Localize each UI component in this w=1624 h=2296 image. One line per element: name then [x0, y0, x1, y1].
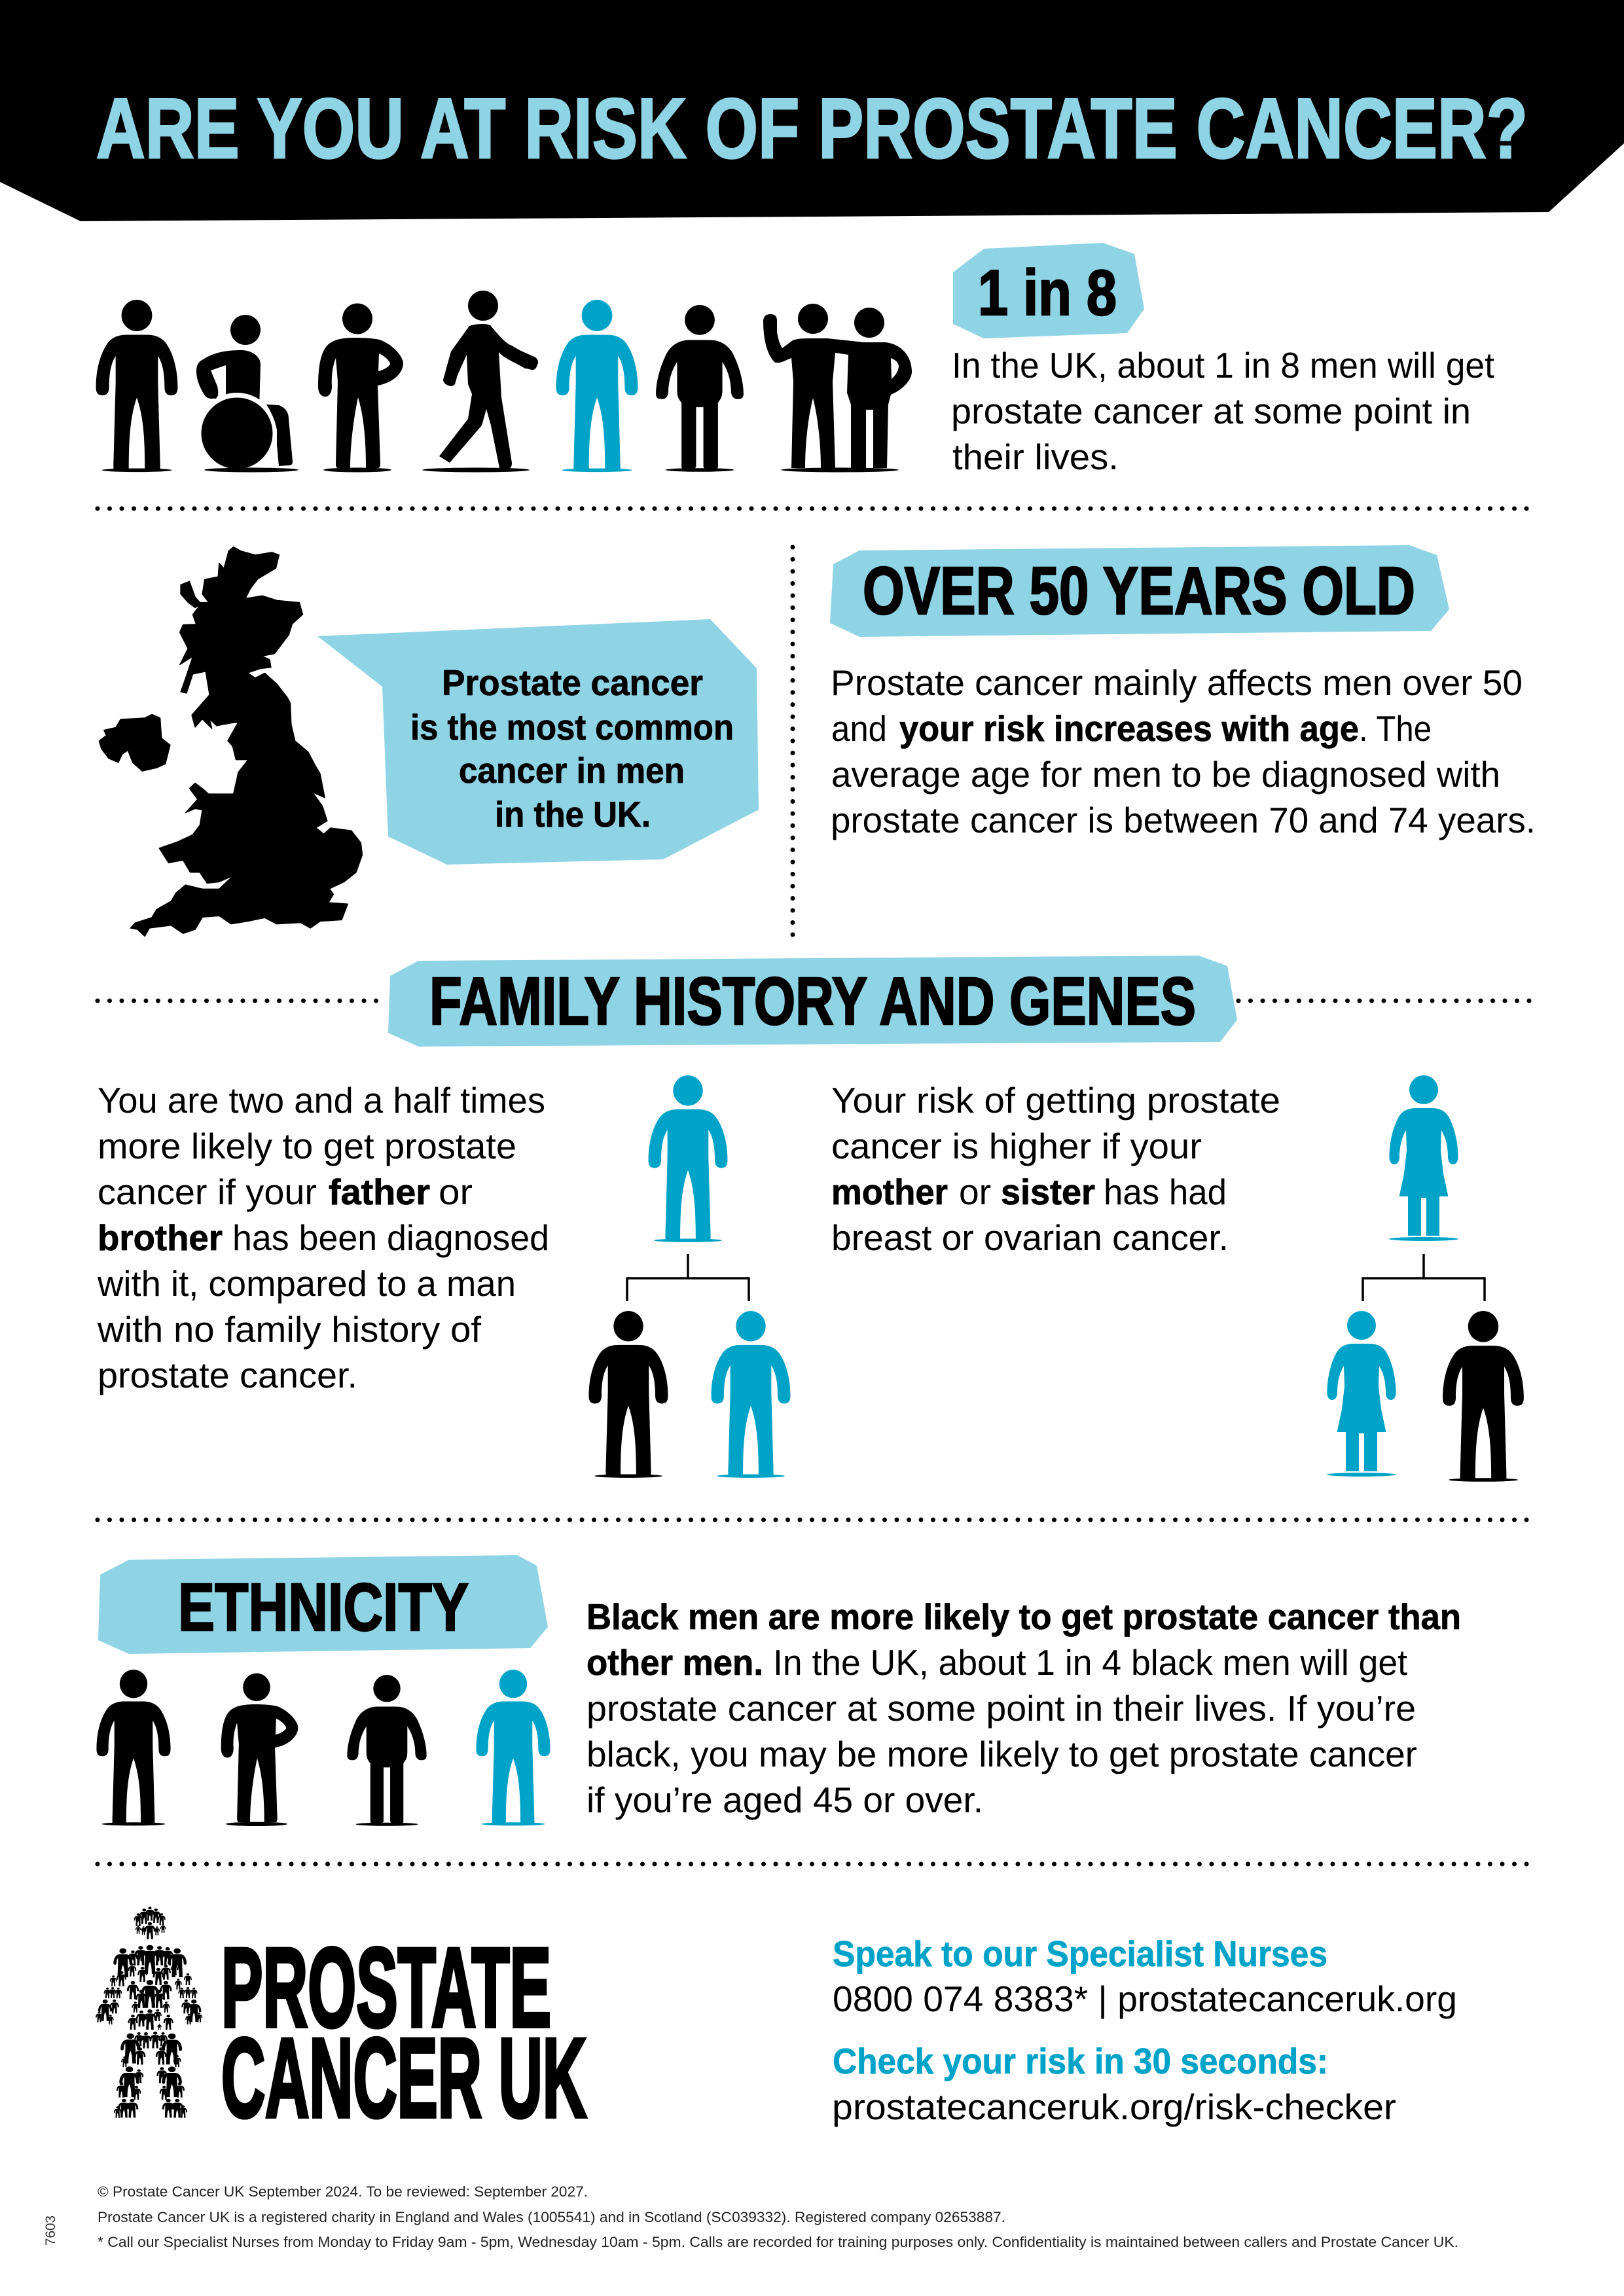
contact details: prostatecanceruk.org/risk-checker — [832, 2087, 1396, 2127]
text: father or brother: more likely to get prostate — [98, 1126, 516, 1166]
logo wordmark: CANCER UK — [221, 2015, 586, 2141]
heading: over 50 years old — [830, 545, 1449, 637]
badge: 1 in 8: 1 in 8 — [978, 257, 1117, 329]
footer small print: © Prostate Cancer UK September 2024. To be reviewed: September 2027. — [98, 2183, 588, 2200]
heading: ethnicity: ETHNICITY — [178, 1570, 469, 1645]
logo wordmark — [221, 1925, 586, 2141]
icon: standing man — [96, 300, 177, 472]
logo wordmark: PROSTATE — [221, 1925, 551, 2051]
text: mother or sister: Your risk of getting prostate — [831, 1080, 1280, 1121]
icon: larger man — [347, 1675, 427, 1826]
text: age risk: prostate cancer is between 70 and 74 years. — [831, 800, 1536, 840]
icon: UK map — [99, 547, 362, 937]
icon: man with hand on hip — [221, 1674, 298, 1826]
text: age risk: your risk increases with age — [899, 708, 1359, 749]
text: mother or sister: has had — [1104, 1172, 1227, 1212]
callout: most common cancer: cancer in men — [459, 750, 685, 791]
connector — [1363, 1254, 1485, 1301]
job code: 7603 — [43, 2215, 58, 2246]
text: father or brother: with it, compared to a man — [97, 1263, 516, 1304]
footer small print: * Call our Specialist Nurses from Monday to Friday 9am - 5pm, Wednesday 10am - 5pm. Calls are recorded for training purposes only. Confidentiality is maintained between callers and Prostate Cancer UK. — [98, 2234, 1458, 2250]
text: age risk: . The — [1359, 708, 1432, 749]
family tree: father and sons — [589, 1075, 790, 1478]
text: ethnicity risk: In the UK, about 1 in 4 black men will get — [773, 1642, 1407, 1683]
logo: Prostate Cancer UK — [96, 1907, 586, 2141]
ethnicity figures row — [96, 1670, 550, 1826]
text: age risk — [831, 662, 1536, 840]
icon: man with hand on hip — [318, 304, 403, 473]
icon: highlighted blue man — [556, 300, 638, 472]
text: 1 in 8 explanation: prostate cancer at some point in — [951, 391, 1471, 431]
text: ethnicity risk: prostate cancer at some point in their lives. If you’re — [586, 1688, 1416, 1729]
connector — [627, 1254, 749, 1301]
icon: highlighted blue man — [476, 1670, 550, 1825]
header banner — [0, 0, 1624, 221]
text: father or brother: or — [439, 1172, 473, 1212]
text: age risk: and — [831, 708, 887, 749]
icon: man — [96, 1670, 171, 1825]
callout: most common cancer: is the most common — [410, 707, 734, 747]
footer small print: Prostate Cancer UK is a registered charity in England and Wales (1005541) and in Scotland (SC039332). Registered company 02653887. — [98, 2209, 1005, 2225]
text: ethnicity risk: Black men are more likely to get prostate cancer than — [586, 1596, 1461, 1637]
text: mother or sister: or — [959, 1172, 991, 1212]
contact details: Speak to our Specialist Nurses — [833, 1933, 1327, 1974]
heading: family history and genes: FAMILY HISTORY AND GENES — [429, 963, 1196, 1039]
text: father or brother — [97, 1080, 549, 1395]
family tree: mother and children — [1327, 1075, 1524, 1482]
badge: 1 in 8 — [953, 243, 1144, 338]
text: father or brother: with no family history of — [97, 1309, 482, 1350]
text: mother or sister: mother — [831, 1172, 948, 1212]
text: mother or sister: breast or ovarian cancer. — [831, 1217, 1229, 1258]
icon: two men with arm around shoulder — [763, 304, 912, 473]
heading: family history and genes — [388, 956, 1237, 1047]
text: mother or sister: cancer is higher if your — [831, 1126, 1202, 1166]
icon: daughter — [1327, 1311, 1396, 1477]
text: age risk: Prostate cancer mainly affects men over 50 — [831, 662, 1523, 703]
text: father or brother: prostate cancer. — [98, 1355, 357, 1395]
text: 1 in 8 explanation: their lives. — [952, 437, 1119, 477]
icon: walking man — [422, 291, 538, 473]
contact details: Check your risk in 30 seconds: — [833, 2041, 1328, 2081]
callout: most common cancer — [317, 619, 759, 865]
icon: figure made of small people — [96, 1907, 202, 2118]
text: ethnicity risk: if you’re aged 45 or over. — [586, 1780, 983, 1820]
callout: most common cancer: Prostate cancer — [442, 662, 703, 703]
text: father or brother: You are two and a half times — [98, 1080, 545, 1121]
text: ethnicity risk: other men. — [586, 1642, 763, 1683]
footer small print — [98, 2183, 1458, 2250]
icon: mother — [1389, 1075, 1458, 1241]
contact details — [832, 1933, 1457, 2127]
icon: larger man — [656, 305, 744, 472]
text: father or brother: father — [329, 1172, 430, 1212]
icon: son — [589, 1311, 668, 1478]
contact details: 0800 074 8383* | prostatecanceruk.org — [833, 1979, 1457, 2019]
callout: most common cancer: in the UK. — [495, 794, 651, 834]
text: father or brother: cancer if your — [98, 1172, 317, 1212]
icon: father — [649, 1075, 727, 1242]
text: mother or sister: sister — [1001, 1172, 1095, 1212]
text: father or brother: has been diagnosed — [232, 1217, 549, 1258]
people row: 1 in 8 men highlighted — [96, 291, 912, 474]
text: mother or sister — [831, 1080, 1280, 1258]
icon: son — [1443, 1311, 1524, 1482]
icon: son with prostate cancer — [712, 1311, 790, 1478]
heading: over 50 years old: OVER 50 YEARS OLD — [863, 553, 1415, 628]
text: 1 in 8 explanation — [951, 345, 1494, 477]
text: 1 in 8 explanation: In the UK, about 1 in 8 men will get — [952, 345, 1494, 386]
text: ethnicity risk: black, you may be more likely to get prostate cancer — [586, 1734, 1417, 1774]
text: ethnicity risk — [586, 1596, 1461, 1820]
text: father or brother: brother — [98, 1217, 223, 1258]
text: age risk: average age for men to be diagnosed with — [831, 754, 1500, 795]
heading: ethnicity — [98, 1555, 548, 1654]
icon: wheelchair user — [196, 315, 298, 474]
